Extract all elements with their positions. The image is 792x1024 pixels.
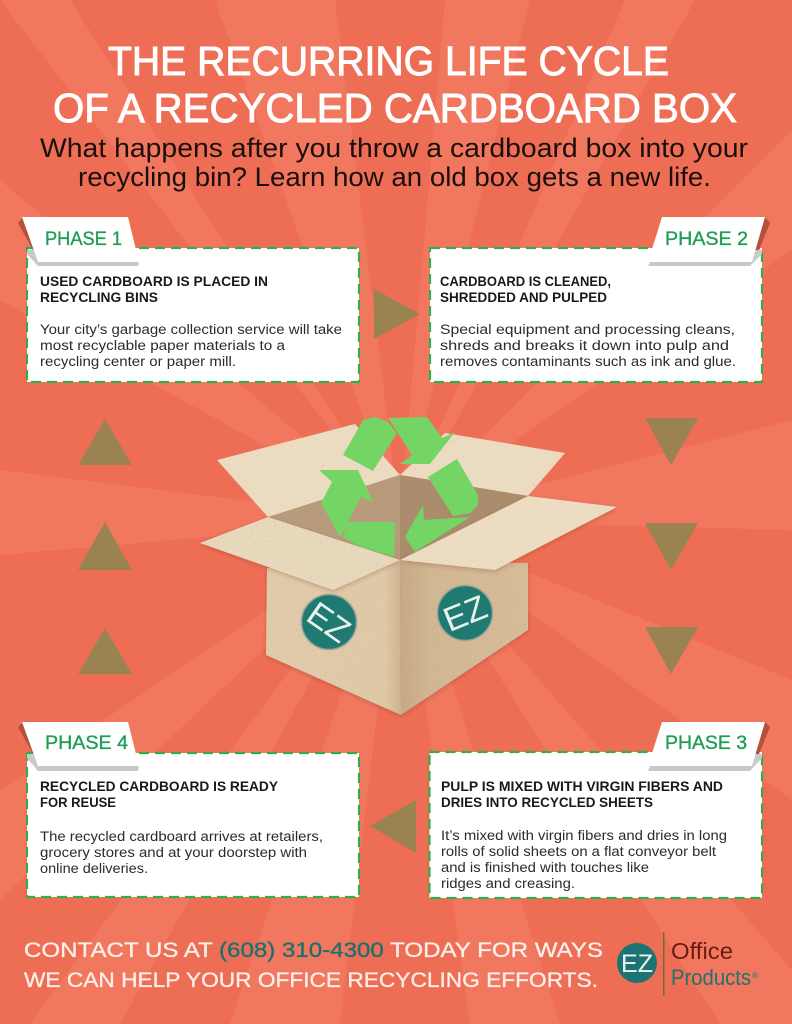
logo: EZ Office Products: Products <box>671 965 751 990</box>
phase 1 heading <box>40 273 268 305</box>
panel: phase 3 <box>430 722 770 898</box>
title: OF A RECYCLED CARDBOARD BOX <box>53 85 737 131</box>
subtitle <box>40 133 748 192</box>
phase 4 body: online deliveries. <box>40 861 148 876</box>
phase 4 heading: FOR REUSE <box>40 794 116 810</box>
arrow: phase 3 to phase 4 <box>370 800 416 853</box>
phase 2 body: shreds and breaks it down into pulp and <box>440 338 729 353</box>
icon: green recycling arrows <box>319 417 478 557</box>
cardboard box illustration <box>200 417 617 715</box>
phase 3 body: It’s mixed with virgin fibers and dries in long <box>441 828 727 843</box>
phase 1 heading: USED CARDBOARD IS PLACED IN <box>40 273 268 289</box>
icon: EZ sticker right: EZ <box>438 588 493 640</box>
phase 2 heading: SHREDDED AND PULPED <box>440 289 607 305</box>
phase 1 body: recycling center or paper mill. <box>40 354 236 369</box>
phase 4 tab <box>18 722 139 771</box>
phase 1 tab <box>18 217 139 266</box>
phase 3 body: ridges and creasing. <box>441 876 575 891</box>
title <box>53 38 737 131</box>
logo: EZ Office Products <box>617 932 758 996</box>
arrow: phase 1 to phase 2 <box>374 289 420 339</box>
arrow: phase 4 to phase 1, middle <box>78 522 132 570</box>
phase 2 heading: CARDBOARD IS CLEANED, <box>440 273 611 289</box>
arrow: phase 4 to phase 1, bottom <box>78 628 132 674</box>
phase 2 body <box>440 322 736 369</box>
phase 2 tab: PHASE 2 <box>665 229 748 250</box>
icon: EZ sticker left: EZ <box>300 595 357 651</box>
panel: phase 2 <box>430 217 770 382</box>
phase 2 body: Special equipment and processing cleans, <box>440 322 735 337</box>
phase 2 body: removes contaminants such as ink and glue. <box>440 354 736 369</box>
phase 3 body <box>441 828 727 891</box>
phase 3 tab: PHASE 3 <box>665 733 747 754</box>
arrow: phase 4 to phase 1, top <box>78 419 132 465</box>
phase 1 tab: PHASE 1 <box>45 229 122 250</box>
panel: phase 4 <box>18 722 359 897</box>
phase 2 tab <box>648 217 770 266</box>
footer call to action: WE CAN HELP YOUR OFFICE RECYCLING EFFORTS. <box>24 969 598 992</box>
phase 4 body <box>40 829 323 876</box>
phase 4 heading <box>40 778 279 810</box>
footer call to action: CONTACT US AT (608) 310-4300 TODAY FOR WAYS <box>24 939 603 962</box>
phase 3 heading: PULP IS MIXED WITH VIRGIN FIBERS AND <box>441 778 723 794</box>
phase 4 heading: RECYCLED CARDBOARD IS READY <box>40 778 279 794</box>
subtitle: recycling bin? Learn how an old box gets a new life. <box>78 162 711 192</box>
phase 3 heading: DRIES INTO RECYCLED SHEETS <box>441 794 653 810</box>
box faces <box>266 560 528 715</box>
logo: EZ Office Products: EZ <box>621 950 653 978</box>
title: THE RECURRING LIFE CYCLE <box>108 38 669 84</box>
phase 3 heading <box>441 778 723 810</box>
arrow: phase 2 to phase 3, bottom <box>645 627 698 674</box>
phase 2 heading <box>440 273 611 305</box>
phase 1 body <box>40 322 342 369</box>
panel: phase 1 <box>18 217 359 382</box>
phase 3 tab <box>648 722 770 771</box>
phase 3 body: and is finished with touches like <box>441 860 649 875</box>
phase 3 body: rolls of solid sheets on a flat conveyor belt <box>441 844 716 859</box>
phase 1 body: most recyclable paper materials to a <box>40 338 286 353</box>
phase 1 heading: RECYCLING BINS <box>40 289 158 305</box>
phase 1 body: Your city’s garbage collection service will take <box>40 322 342 337</box>
arrow: phase 2 to phase 3, middle <box>645 523 698 570</box>
box back flaps and interior <box>217 424 565 560</box>
arrow: phase 2 to phase 3, top <box>645 418 698 465</box>
phase 4 body: grocery stores and at your doorstep with <box>40 845 307 860</box>
subtitle: What happens after you throw a cardboard box into your <box>40 133 748 163</box>
footer call to action <box>24 939 603 992</box>
logo: EZ Office Products: ® <box>752 971 758 980</box>
phase 4 body: The recycled cardboard arrives at retailers, <box>40 829 323 844</box>
phase 4 tab: PHASE 4 <box>45 733 128 754</box>
logo: EZ Office Products: Office <box>671 938 733 964</box>
box front flaps <box>200 496 617 590</box>
